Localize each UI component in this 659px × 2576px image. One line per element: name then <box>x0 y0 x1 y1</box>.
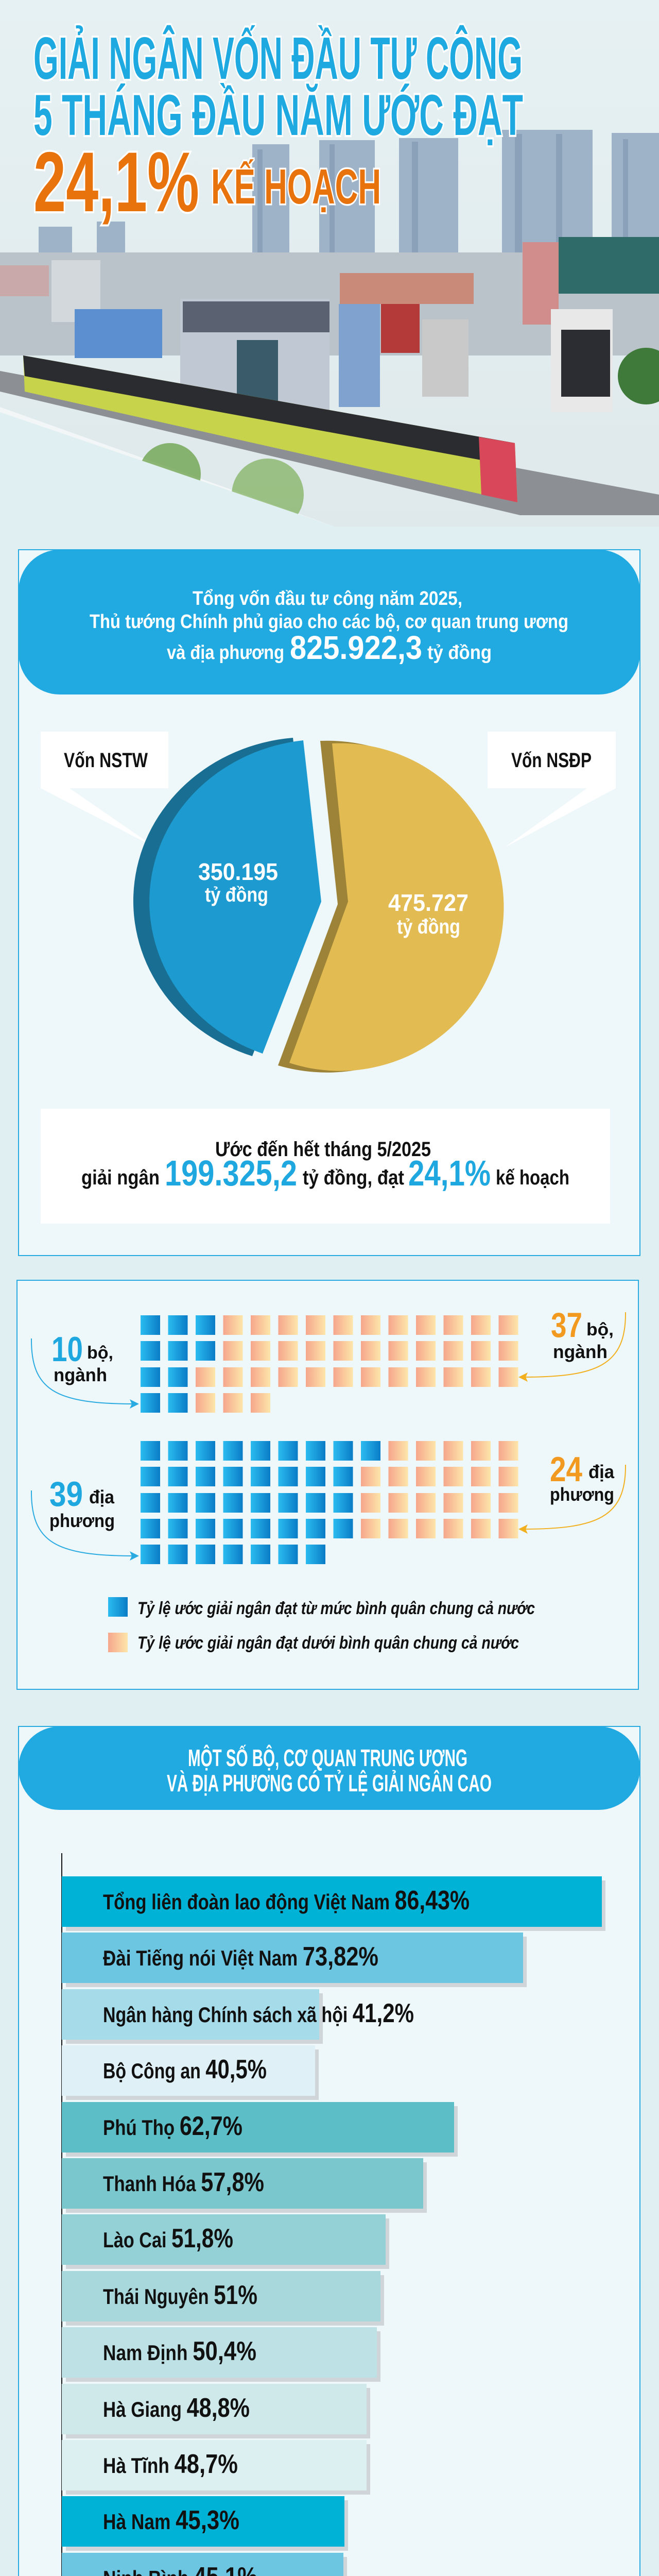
label: 24 địa phương: địa <box>588 1461 615 1482</box>
callout: disbursement estimate: 199.325,2 <box>165 1153 297 1193</box>
callout: disbursement estimate: 24,1% <box>408 1153 491 1193</box>
bar: Hà Nam <box>62 2496 348 2551</box>
label: 37 bộ, ngành: bộ, <box>586 1320 614 1340</box>
train <box>0 355 659 531</box>
arrow: 39 địa phương <box>31 1490 139 1561</box>
panel: squares chart <box>17 1280 638 1689</box>
label: 39 địa phương: phương <box>49 1510 115 1531</box>
bar: Hà Nam: Hà Nam 45,3% <box>103 2505 239 2535</box>
label: Vốn NSĐP <box>488 732 616 848</box>
arrow: 10 bộ ngành <box>31 1338 139 1409</box>
pie header banner: và địa phương <box>167 642 284 664</box>
legend: Tỷ lệ ước giải ngân đạt từ mức bình quân chung cả nước <box>137 1599 535 1618</box>
label: Vốn NSĐP: Vốn NSĐP <box>511 749 592 772</box>
label: Vốn NSTW <box>41 732 168 848</box>
pie slice: NSTW: tỷ đồng <box>205 884 268 906</box>
bar chart header <box>19 1726 640 1810</box>
label: 39 địa phương <box>49 1475 115 1531</box>
panel: total capital pie chart <box>19 550 640 1256</box>
bar chart header: MỘT SỐ BỘ, CƠ QUAN TRUNG ƯƠNG <box>188 1744 467 1771</box>
label: 37 bộ, ngành: 37 <box>551 1306 582 1345</box>
callout: disbursement estimate: tỷ đồng, đạt <box>303 1166 404 1189</box>
bar: Ninh Bình <box>62 2553 347 2576</box>
pie slice: NSTW <box>133 738 321 1056</box>
label: 37 bộ, ngành: ngành <box>553 1341 608 1362</box>
arrow: 24 địa phương <box>518 1465 626 1534</box>
pie header banner: Thủ tướng Chính phủ giao cho các bộ, cơ quan trung ương <box>90 611 568 633</box>
label: 24 địa phương: phương <box>550 1484 614 1505</box>
callout: disbursement estimate: giải ngân <box>81 1166 160 1189</box>
label: 24 địa phương <box>550 1450 615 1505</box>
bar: Hà Giang <box>62 2384 370 2438</box>
bar: Thanh Hóa <box>62 2158 427 2213</box>
bar: Hà Giang: Hà Giang 48,8% <box>103 2393 250 2423</box>
panel: high disbursement bar chart <box>19 1726 640 2576</box>
bar chart <box>62 1876 605 2576</box>
label: 10 bộ, ngành: 10 <box>51 1330 83 1369</box>
bar: Phú Thọ: Phú Thọ 62,7% <box>103 2111 242 2141</box>
bar: Ngân hàng Chính sách xã hội <box>62 1989 414 2044</box>
bar: Bộ Công an <box>62 2045 319 2100</box>
title <box>33 24 523 229</box>
bar: Đài Tiếng nói Việt Nam <box>62 1933 527 1987</box>
title: KẾ HOẠCH <box>211 159 381 214</box>
pie slice: NSĐP <box>278 741 504 1073</box>
arrow: 37 bộ ngành <box>518 1312 626 1382</box>
bar: Tổng liên đoàn lao động Việt Nam <box>62 1876 605 1931</box>
bar: Thái Nguyên: Thái Nguyên 51% <box>103 2280 257 2310</box>
pie slice: NSĐP: 475.727 <box>388 889 469 916</box>
label: 10 bộ, ngành: bộ, <box>87 1343 113 1363</box>
bar: Thanh Hóa: Thanh Hóa 57,8% <box>103 2167 264 2197</box>
bar: Ngân hàng Chính sách xã hội: Ngân hàng Chính sách xã hội 41,2% <box>103 1998 414 2028</box>
bar: Hà Tĩnh: Hà Tĩnh 48,7% <box>103 2449 238 2479</box>
bar: Bộ Công an: Bộ Công an 40,5% <box>103 2055 267 2084</box>
label: 39 địa phương: địa <box>89 1486 115 1507</box>
pie header banner: Tổng vốn đầu tư công năm 2025, <box>193 588 462 609</box>
bar: Hà Tĩnh <box>62 2440 370 2495</box>
bar: Lào Cai <box>62 2214 389 2269</box>
pie slice: NSTW: 350.195 <box>198 858 278 885</box>
legend: Tỷ lệ ước giải ngân đạt dưới bình quân chung cả nước <box>137 1633 519 1653</box>
callout: disbursement estimate: kế hoạch <box>496 1166 569 1189</box>
bar: Phú Thọ <box>62 2102 458 2157</box>
label: 10 bộ, ngành: ngành <box>54 1364 107 1385</box>
bar chart header: VÀ ĐỊA PHƯƠNG CÓ TỶ LỆ GIẢI NGÂN CAO <box>167 1770 492 1797</box>
header photo: city and metro train <box>0 130 659 524</box>
title: 24,1% <box>33 134 199 229</box>
label: 24 địa phương: 24 <box>550 1450 582 1489</box>
pie slice: NSĐP: tỷ đồng <box>397 916 460 938</box>
bar: Đài Tiếng nói Việt Nam: Đài Tiếng nói Việt Nam 73,82% <box>103 1942 378 1972</box>
pie header banner <box>19 550 640 694</box>
squares: địa phương <box>141 1441 518 1564</box>
bar: Lào Cai: Lào Cai 51,8% <box>103 2224 233 2253</box>
pie header banner: 825.922,3 <box>290 629 422 666</box>
bar: Nam Định: Nam Định 50,4% <box>103 2336 256 2366</box>
legend <box>108 1597 535 1653</box>
bar: Nam Định <box>62 2327 380 2382</box>
bar: Tổng liên đoàn lao động Việt Nam: Tổng liên đoàn lao động Việt Nam 86,43% <box>103 1886 470 1916</box>
bar: Thái Nguyên <box>62 2271 384 2326</box>
pie header banner: tỷ đồng <box>427 642 492 664</box>
label: Vốn NSTW: Vốn NSTW <box>64 749 148 772</box>
label: 39 địa phương: 39 <box>49 1475 83 1514</box>
callout: disbursement estimate: Ước đến hết tháng 5/2025 <box>215 1138 431 1161</box>
squares: bộ, ngành <box>141 1315 518 1413</box>
label: 10 bộ, ngành <box>51 1330 113 1385</box>
label: 37 bộ, ngành <box>551 1306 614 1362</box>
callout: disbursement estimate <box>41 1109 610 1224</box>
